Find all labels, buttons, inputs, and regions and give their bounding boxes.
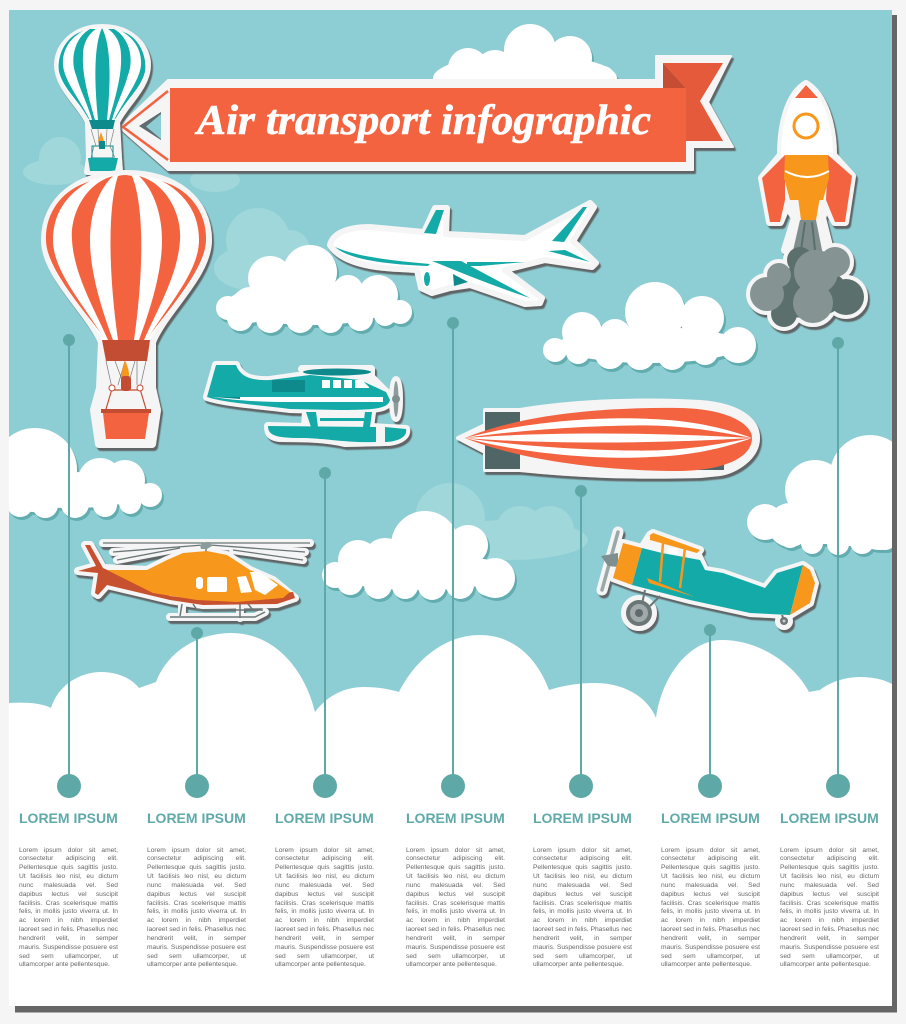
body text xyxy=(147,846,246,968)
column 1 xyxy=(19,810,118,968)
body text: Lorem ipsum dolor sit amet, xyxy=(19,846,118,854)
heading: LOREM IPSUM xyxy=(275,810,374,826)
cloud upper right xyxy=(543,282,756,370)
body text: dapibus lectus vel suscipit xyxy=(19,891,118,898)
body text: hendrerit velit, in semper xyxy=(275,935,374,942)
body text: consectetur adipiscing elit. xyxy=(533,855,632,862)
cloud upper left xyxy=(216,245,412,333)
body text: ullamcorper ante pellentesque. xyxy=(147,961,238,968)
airliner xyxy=(330,203,596,304)
body text: Lorem ipsum dolor sit amet, xyxy=(147,846,246,854)
heading: LOREM IPSUM xyxy=(406,810,505,826)
body text: Ut facilisis leo nisl, eu dictum xyxy=(533,873,632,880)
connector line 5 xyxy=(569,485,593,798)
body text: nunc malesuada vel. Sed xyxy=(147,882,246,889)
ribbon fold xyxy=(663,63,723,141)
body text: hendrerit velit, in semper xyxy=(406,935,505,942)
title banner xyxy=(119,56,733,170)
column 4 xyxy=(406,810,505,968)
body text xyxy=(661,846,760,968)
cloud behind banner xyxy=(433,24,617,102)
body text: hendrerit velit, in semper xyxy=(147,935,246,942)
body text xyxy=(780,846,879,968)
body text: ac lorem in nibh imperdiet xyxy=(661,917,760,924)
body text: felis, in mollis justo viverra ut. In xyxy=(406,908,505,915)
body text: sed sem ullamcorper, ut xyxy=(780,953,879,960)
biplane xyxy=(601,532,815,627)
body text: facilisis. Cras scelerisque mattis xyxy=(19,900,118,907)
body text: ullamcorper ante pellentesque. xyxy=(533,961,624,968)
body text: mauris. Suspendisse posuere est xyxy=(780,944,879,951)
body text: ac lorem in nibh imperdiet xyxy=(533,917,632,924)
body text: dapibus lectus vel suscipit xyxy=(780,891,879,898)
body text: laoreet sed in felis. Phasellus nec xyxy=(780,926,879,933)
body text: Pellentesque quis sagittis justo. xyxy=(19,864,118,871)
body text: facilisis. Cras scelerisque mattis xyxy=(275,900,374,907)
body text xyxy=(533,846,632,968)
body text: consectetur adipiscing elit. xyxy=(780,855,879,862)
title text: Air transport infographic xyxy=(194,98,651,144)
body text: Ut facilisis leo nisl, eu dictum xyxy=(780,873,879,880)
seaplane xyxy=(207,365,406,443)
body text: ac lorem in nibh imperdiet xyxy=(19,917,118,924)
heading: LOREM IPSUM xyxy=(19,810,118,826)
body text: nunc malesuada vel. Sed xyxy=(406,882,505,889)
column 6 xyxy=(661,810,760,968)
small teal balloon xyxy=(57,27,148,172)
body text: Pellentesque quis sagittis justo. xyxy=(661,864,760,871)
banner body xyxy=(170,88,686,162)
body text: dapibus lectus vel suscipit xyxy=(275,891,374,898)
body text xyxy=(406,846,505,968)
body text: mauris. Suspendisse posuere est xyxy=(661,944,760,951)
heading: LOREM IPSUM xyxy=(533,810,632,826)
body text: ullamcorper ante pellentesque. xyxy=(406,961,497,968)
body text: consectetur adipiscing elit. xyxy=(147,855,246,862)
large red balloon xyxy=(45,174,208,444)
body text: ullamcorper ante pellentesque. xyxy=(19,961,110,968)
cloud middle left xyxy=(0,428,162,518)
body text: sed sem ullamcorper, ut xyxy=(275,953,374,960)
rocket xyxy=(750,84,864,327)
body text: ullamcorper ante pellentesque. xyxy=(275,961,366,968)
body text: Ut facilisis leo nisl, eu dictum xyxy=(661,873,760,880)
connector line 4 xyxy=(441,317,465,798)
body text: ac lorem in nibh imperdiet xyxy=(275,917,374,924)
body text: Lorem ipsum dolor sit amet, xyxy=(406,846,505,854)
body text: sed sem ullamcorper, ut xyxy=(533,953,632,960)
body text: felis, in mollis justo viverra ut. In xyxy=(533,908,632,915)
body text: nunc malesuada vel. Sed xyxy=(533,882,632,889)
connector line 3 xyxy=(313,467,337,798)
body text: ac lorem in nibh imperdiet xyxy=(780,917,879,924)
body text: consectetur adipiscing elit. xyxy=(275,855,374,862)
body text: Lorem ipsum dolor sit amet, xyxy=(533,846,632,854)
body text: mauris. Suspendisse posuere est xyxy=(406,944,505,951)
body text: nunc malesuada vel. Sed xyxy=(661,882,760,889)
body text: hendrerit velit, in semper xyxy=(19,935,118,942)
banner outline xyxy=(119,56,733,170)
faint background clouds xyxy=(23,137,588,560)
body text: Ut facilisis leo nisl, eu dictum xyxy=(19,873,118,880)
body text: felis, in mollis justo viverra ut. In xyxy=(19,908,118,915)
body text: Ut facilisis leo nisl, eu dictum xyxy=(406,873,505,880)
body text: facilisis. Cras scelerisque mattis xyxy=(780,900,879,907)
body text: ac lorem in nibh imperdiet xyxy=(147,917,246,924)
body text: ullamcorper ante pellentesque. xyxy=(780,961,871,968)
body text: facilisis. Cras scelerisque mattis xyxy=(147,900,246,907)
body text: mauris. Suspendisse posuere est xyxy=(533,944,632,951)
body text xyxy=(275,846,374,968)
body text: Ut facilisis leo nisl, eu dictum xyxy=(147,873,246,880)
body text: dapibus lectus vel suscipit xyxy=(661,891,760,898)
body text: sed sem ullamcorper, ut xyxy=(406,953,505,960)
body text: laoreet sed in felis. Phasellus nec xyxy=(19,926,118,933)
body text: mauris. Suspendisse posuere est xyxy=(19,944,118,951)
body text: consectetur adipiscing elit. xyxy=(406,855,505,862)
body text: nunc malesuada vel. Sed xyxy=(275,882,374,889)
body text: dapibus lectus vel suscipit xyxy=(406,891,505,898)
body text: Lorem ipsum dolor sit amet, xyxy=(661,846,760,854)
body text: Pellentesque quis sagittis justo. xyxy=(533,864,632,871)
column 2 xyxy=(147,810,246,968)
sky background xyxy=(9,10,892,730)
zeppelin xyxy=(458,401,758,477)
body text: Ut facilisis leo nisl, eu dictum xyxy=(275,873,374,880)
body text xyxy=(19,846,118,968)
body text: hendrerit velit, in semper xyxy=(661,935,760,942)
connector line 7 xyxy=(826,337,850,798)
body text: laoreet sed in felis. Phasellus nec xyxy=(406,926,505,933)
body text: Lorem ipsum dolor sit amet, xyxy=(780,846,879,854)
body text: Pellentesque quis sagittis justo. xyxy=(406,864,505,871)
body text: laoreet sed in felis. Phasellus nec xyxy=(661,926,760,933)
column 3 xyxy=(275,810,374,968)
body text: dapibus lectus vel suscipit xyxy=(147,891,246,898)
body text: Lorem ipsum dolor sit amet, xyxy=(275,846,374,854)
body text: ullamcorper ante pellentesque. xyxy=(661,961,752,968)
heading: LOREM IPSUM xyxy=(661,810,760,826)
body text: laoreet sed in felis. Phasellus nec xyxy=(533,926,632,933)
cloud right xyxy=(747,435,906,555)
body text: hendrerit velit, in semper xyxy=(533,935,632,942)
body text: Pellentesque quis sagittis justo. xyxy=(275,864,374,871)
connector line 6 xyxy=(698,624,722,798)
heading: LOREM IPSUM xyxy=(780,810,879,826)
body text: sed sem ullamcorper, ut xyxy=(147,953,246,960)
body text: mauris. Suspendisse posuere est xyxy=(275,944,374,951)
body text: sed sem ullamcorper, ut xyxy=(661,953,760,960)
body text: Pellentesque quis sagittis justo. xyxy=(780,864,879,871)
ground clouds xyxy=(9,633,892,800)
heading: LOREM IPSUM xyxy=(147,810,246,826)
body text: consectetur adipiscing elit. xyxy=(661,855,760,862)
body text: sed sem ullamcorper, ut xyxy=(19,953,118,960)
connector line 1 xyxy=(57,334,81,798)
body text: nunc malesuada vel. Sed xyxy=(19,882,118,889)
body text: facilisis. Cras scelerisque mattis xyxy=(661,900,760,907)
body text: facilisis. Cras scelerisque mattis xyxy=(533,900,632,907)
body text: dapibus lectus vel suscipit xyxy=(533,891,632,898)
body text: mauris. Suspendisse posuere est xyxy=(147,944,246,951)
helicopter xyxy=(78,542,310,618)
body text: laoreet sed in felis. Phasellus nec xyxy=(275,926,374,933)
column 7 xyxy=(780,810,879,968)
body text: felis, in mollis justo viverra ut. In xyxy=(147,908,246,915)
body text: felis, in mollis justo viverra ut. In xyxy=(661,908,760,915)
column 5 xyxy=(533,810,632,968)
body text: felis, in mollis justo viverra ut. In xyxy=(275,908,374,915)
cloud centre xyxy=(322,511,515,600)
connector line 2 xyxy=(185,627,209,798)
body text: ac lorem in nibh imperdiet xyxy=(406,917,505,924)
body text: facilisis. Cras scelerisque mattis xyxy=(406,900,505,907)
banner tail chevron xyxy=(123,91,168,160)
body text: laoreet sed in felis. Phasellus nec xyxy=(147,926,246,933)
body text: nunc malesuada vel. Sed xyxy=(780,882,879,889)
body text: felis, in mollis justo viverra ut. In xyxy=(780,908,879,915)
body text: consectetur adipiscing elit. xyxy=(19,855,118,862)
body text: Pellentesque quis sagittis justo. xyxy=(147,864,246,871)
body text: hendrerit velit, in semper xyxy=(780,935,879,942)
